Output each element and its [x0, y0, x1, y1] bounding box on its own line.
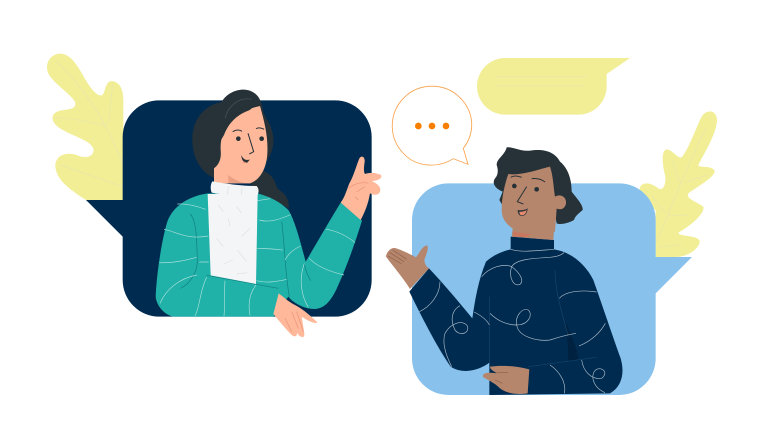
- icon: right yellow leaf: [640, 111, 717, 257]
- woman figure: [156, 90, 381, 337]
- lower hand: [483, 366, 529, 394]
- lower hand: [273, 293, 318, 337]
- raised hand: [386, 245, 429, 289]
- neck: [512, 217, 555, 240]
- panel: man speech bubble group: [386, 58, 717, 395]
- braid: [250, 170, 289, 208]
- icon: left yellow leaf: [47, 54, 123, 200]
- face details: [228, 128, 264, 183]
- hair back: [192, 90, 273, 180]
- panel: navy speech bubble: [86, 100, 372, 317]
- sweater fold shadows: [181, 214, 311, 297]
- face: [502, 167, 566, 234]
- sweater shadows: [565, 320, 579, 361]
- navy sweater: [409, 237, 622, 395]
- white turtleneck: [208, 194, 258, 284]
- hair fringe: [210, 97, 255, 150]
- panel: light blue speech bubble: [412, 183, 692, 395]
- neck and face: [214, 106, 267, 183]
- sweater stripes: [159, 199, 355, 316]
- leaf veins: [652, 128, 708, 247]
- teal sweater: [156, 193, 362, 317]
- icon: outline bubble with dots: [392, 86, 472, 165]
- icon: yellow bubble: [477, 58, 630, 115]
- right raised hand: [341, 157, 381, 220]
- panel: woman speech bubble with figure: [47, 54, 381, 337]
- hair: [494, 147, 583, 224]
- man figure: [386, 147, 622, 395]
- face details: [511, 176, 545, 216]
- sweater thread lines: [419, 249, 605, 393]
